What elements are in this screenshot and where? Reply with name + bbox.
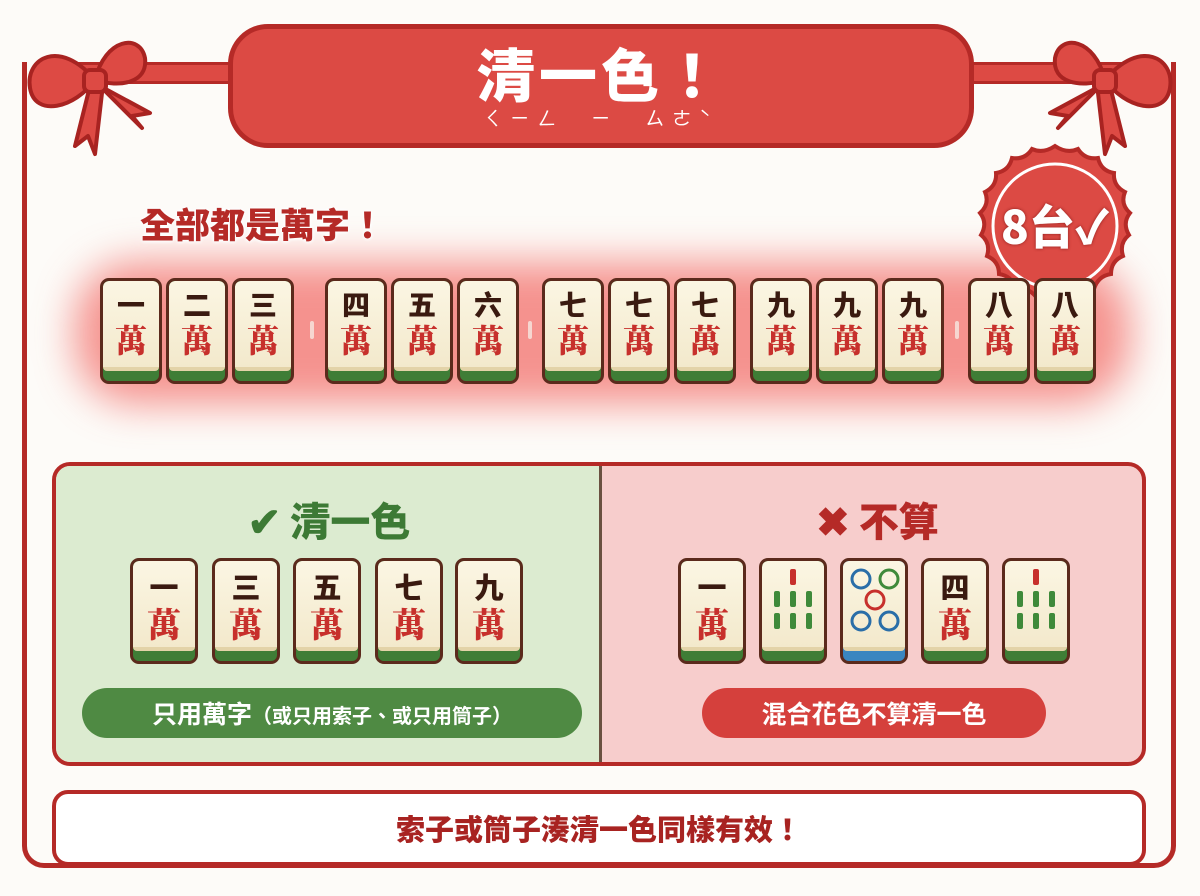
tile row: all wan: 萬 — [983, 316, 1015, 362]
pill: valid note: 只用萬字（或只用索子、或只用筒子） — [152, 695, 512, 731]
tile row: all wan: 萬 — [181, 316, 213, 362]
tile row: all wan: 萬 — [689, 316, 721, 362]
tile row: all wan: 七 — [691, 284, 719, 324]
tile row: all wan: 萬 — [897, 316, 929, 362]
tile row: all wan — [100, 278, 1096, 384]
tile row: all wan: 二 — [183, 284, 211, 324]
tiles: valid: 三 — [231, 565, 260, 607]
panel: invalid — [678, 490, 1070, 738]
tile row: all wan: 七 — [559, 284, 587, 324]
icon: bow right — [1048, 40, 1172, 156]
icon: bow left — [28, 40, 152, 156]
tile row: all wan: 萬 — [623, 316, 655, 362]
bopomofo: ㄑㄧㄥ ㄧ ㄙㄜˋ — [483, 104, 719, 131]
tile row: all wan: 四 — [342, 284, 370, 324]
comparison panel — [52, 462, 1146, 766]
heading: valid: ✔ 清一色 — [248, 490, 410, 548]
tile row: all wan: 八 — [1051, 284, 1079, 324]
bottom note: 索子或筒子湊清一色同樣有效！ — [396, 807, 802, 849]
tiles: valid: 五 — [312, 565, 342, 607]
tile row: all wan: 七 — [625, 284, 653, 324]
tile row: all wan: 九 — [899, 284, 927, 324]
tile row: all wan: 一 — [117, 284, 145, 324]
tiles: mixed — [678, 558, 1070, 664]
tile row: all wan: 萬 — [472, 316, 504, 362]
tiles: valid: 一 — [149, 565, 178, 607]
title banner — [228, 24, 974, 148]
tiles: valid — [130, 558, 523, 664]
tile row: all wan: 九 — [833, 284, 861, 324]
pill: valid note — [82, 688, 582, 738]
tiles: valid: 萬 — [392, 598, 426, 647]
badge: 8 tai: 8台✓ — [1001, 192, 1109, 258]
pill: invalid note — [702, 688, 1046, 738]
tiles: mixed: 一 — [697, 565, 726, 607]
title: 清一色！ — [477, 30, 725, 114]
tiles: valid: 七 — [394, 565, 424, 607]
tile row: all wan: 萬 — [765, 316, 797, 362]
tile row: all wan: 三 — [249, 284, 277, 324]
tiles: mixed: 萬 — [938, 598, 972, 647]
tile row: all wan: 萬 — [340, 316, 372, 362]
tile row: all wan: 九 — [767, 284, 795, 324]
tile row: all wan: 五 — [408, 284, 436, 324]
panel: valid — [56, 466, 602, 766]
tile row: all wan: 六 — [474, 284, 502, 324]
glow behind tiles — [75, 262, 1130, 404]
ribbon band — [40, 62, 1160, 84]
tiles: valid: 萬 — [229, 598, 263, 647]
tile row: all wan: 萬 — [247, 316, 279, 362]
heading: invalid: ✖ 不算 — [816, 490, 939, 548]
bottom note — [52, 790, 1146, 866]
tile row: all wan: 萬 — [115, 316, 147, 362]
tiles: valid: 萬 — [147, 598, 181, 647]
tiles: mixed: 萬 — [695, 598, 729, 647]
tiles: valid: 九 — [474, 565, 504, 607]
tile row: all wan: 萬 — [557, 316, 589, 362]
tile row: all wan: 萬 — [831, 316, 863, 362]
heading: all wan: 全部都是萬字！ — [140, 198, 385, 249]
tile row: all wan: 八 — [985, 284, 1013, 324]
tiles: valid: 萬 — [310, 598, 344, 647]
pill: invalid note: 混合花色不算清一色 — [761, 695, 986, 731]
badge: 8 tai — [977, 144, 1133, 298]
tiles: valid: 萬 — [472, 598, 506, 647]
tiles: mixed: 四 — [940, 565, 970, 607]
tile row: all wan: 萬 — [406, 316, 438, 362]
tile row: all wan: 萬 — [1049, 316, 1081, 362]
